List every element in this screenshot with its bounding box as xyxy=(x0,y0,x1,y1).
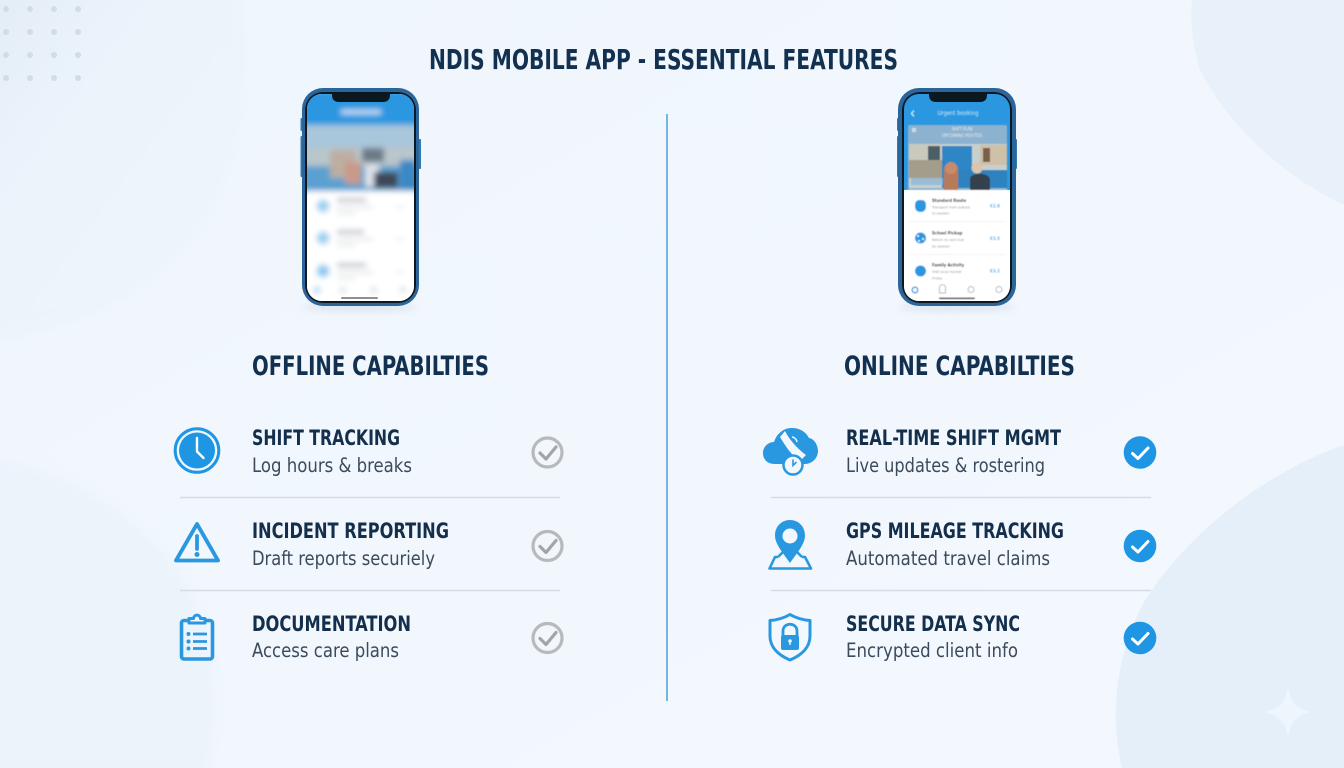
phone: sharp app screen xyxy=(897,88,1017,311)
row: shift tracking xyxy=(175,426,562,477)
panel: offline capabilities xyxy=(175,88,562,662)
feature text xyxy=(252,519,449,570)
phone: sharp app screen: €3.2 xyxy=(989,268,1000,274)
icon: blue check xyxy=(1124,436,1156,469)
section heading: OFFLINE CAPABILTIES xyxy=(252,351,489,382)
phone: sharp app screen: SHIFT PLAN xyxy=(952,126,973,132)
row: incident reporting xyxy=(176,519,562,570)
icon: clock xyxy=(175,429,219,472)
phone: blurred app screen xyxy=(300,88,422,311)
row: real-time shift management xyxy=(763,426,1156,477)
feature text: Access care plans xyxy=(252,639,399,662)
icon: blue check xyxy=(1124,622,1156,654)
feature text: DOCUMENTATION xyxy=(252,612,411,636)
feature text xyxy=(846,612,1020,662)
icon: grey check xyxy=(533,438,562,467)
feature text xyxy=(252,612,411,662)
icon: map pin xyxy=(770,520,811,568)
section heading: ONLINE CAPABILTIES xyxy=(844,351,1075,382)
phone: sharp app screen: Standard Route xyxy=(932,198,967,204)
icon: cloud with clock xyxy=(763,428,818,474)
phone: sharp app screen: Family Activity xyxy=(932,262,965,268)
icon: blue check xyxy=(1124,530,1156,562)
feature text: Log hours & breaks xyxy=(252,454,412,477)
phone: sharp app screen: by session xyxy=(932,244,950,248)
phone: sharp app screen: €3.5 xyxy=(989,236,1000,242)
phone: sharp app screen: UPCOMING ROUTES xyxy=(942,133,982,139)
row: documentation xyxy=(182,612,562,662)
feature text: REAL-TIME SHIFT MGMT xyxy=(846,426,1061,450)
icon: grey check xyxy=(533,532,562,560)
icon: warning triangle xyxy=(176,524,218,560)
feature text: Live updates & rostering xyxy=(846,454,1045,477)
feature text: Automated travel claims xyxy=(846,547,1050,570)
feature text: Encrypted client info xyxy=(846,639,1018,662)
feature text: SECURE DATA SYNC xyxy=(846,612,1020,636)
feature text xyxy=(846,426,1061,477)
phone: sharp app screen: Transport from suburb xyxy=(932,204,970,210)
row: gps mileage tracking xyxy=(770,519,1156,570)
title: NDIS MOBILE APP - ESSENTIAL FEATURES xyxy=(429,43,898,76)
feature text: SHIFT TRACKING xyxy=(252,426,400,450)
phone: sharp app screen: €2.8 xyxy=(989,204,1000,210)
feature text: GPS MILEAGE TRACKING xyxy=(846,519,1064,543)
panel: online capabilities xyxy=(763,88,1156,662)
sparkle xyxy=(1264,688,1311,736)
icon: clipboard xyxy=(182,615,212,659)
centre divider xyxy=(666,114,668,701)
phone: sharp app screen: Return to care hub xyxy=(932,237,964,242)
icon: shield with lock xyxy=(770,614,810,660)
phone: sharp app screen: to session xyxy=(932,210,949,216)
feature text: Draft reports securiely xyxy=(252,547,435,570)
feature text: INCIDENT REPORTING xyxy=(252,519,449,543)
icon: grey check xyxy=(533,624,562,652)
decorative dot grid xyxy=(3,6,81,81)
phone: sharp app screen: Friday xyxy=(932,276,942,280)
feature text xyxy=(846,519,1064,570)
row: secure data sync xyxy=(770,612,1156,662)
phone: sharp app screen: School Pickup xyxy=(932,230,963,236)
feature text xyxy=(252,426,412,477)
phone: sharp app screen: Visit local market xyxy=(932,269,962,274)
phone: sharp app screen: Urgent booking xyxy=(938,109,979,117)
